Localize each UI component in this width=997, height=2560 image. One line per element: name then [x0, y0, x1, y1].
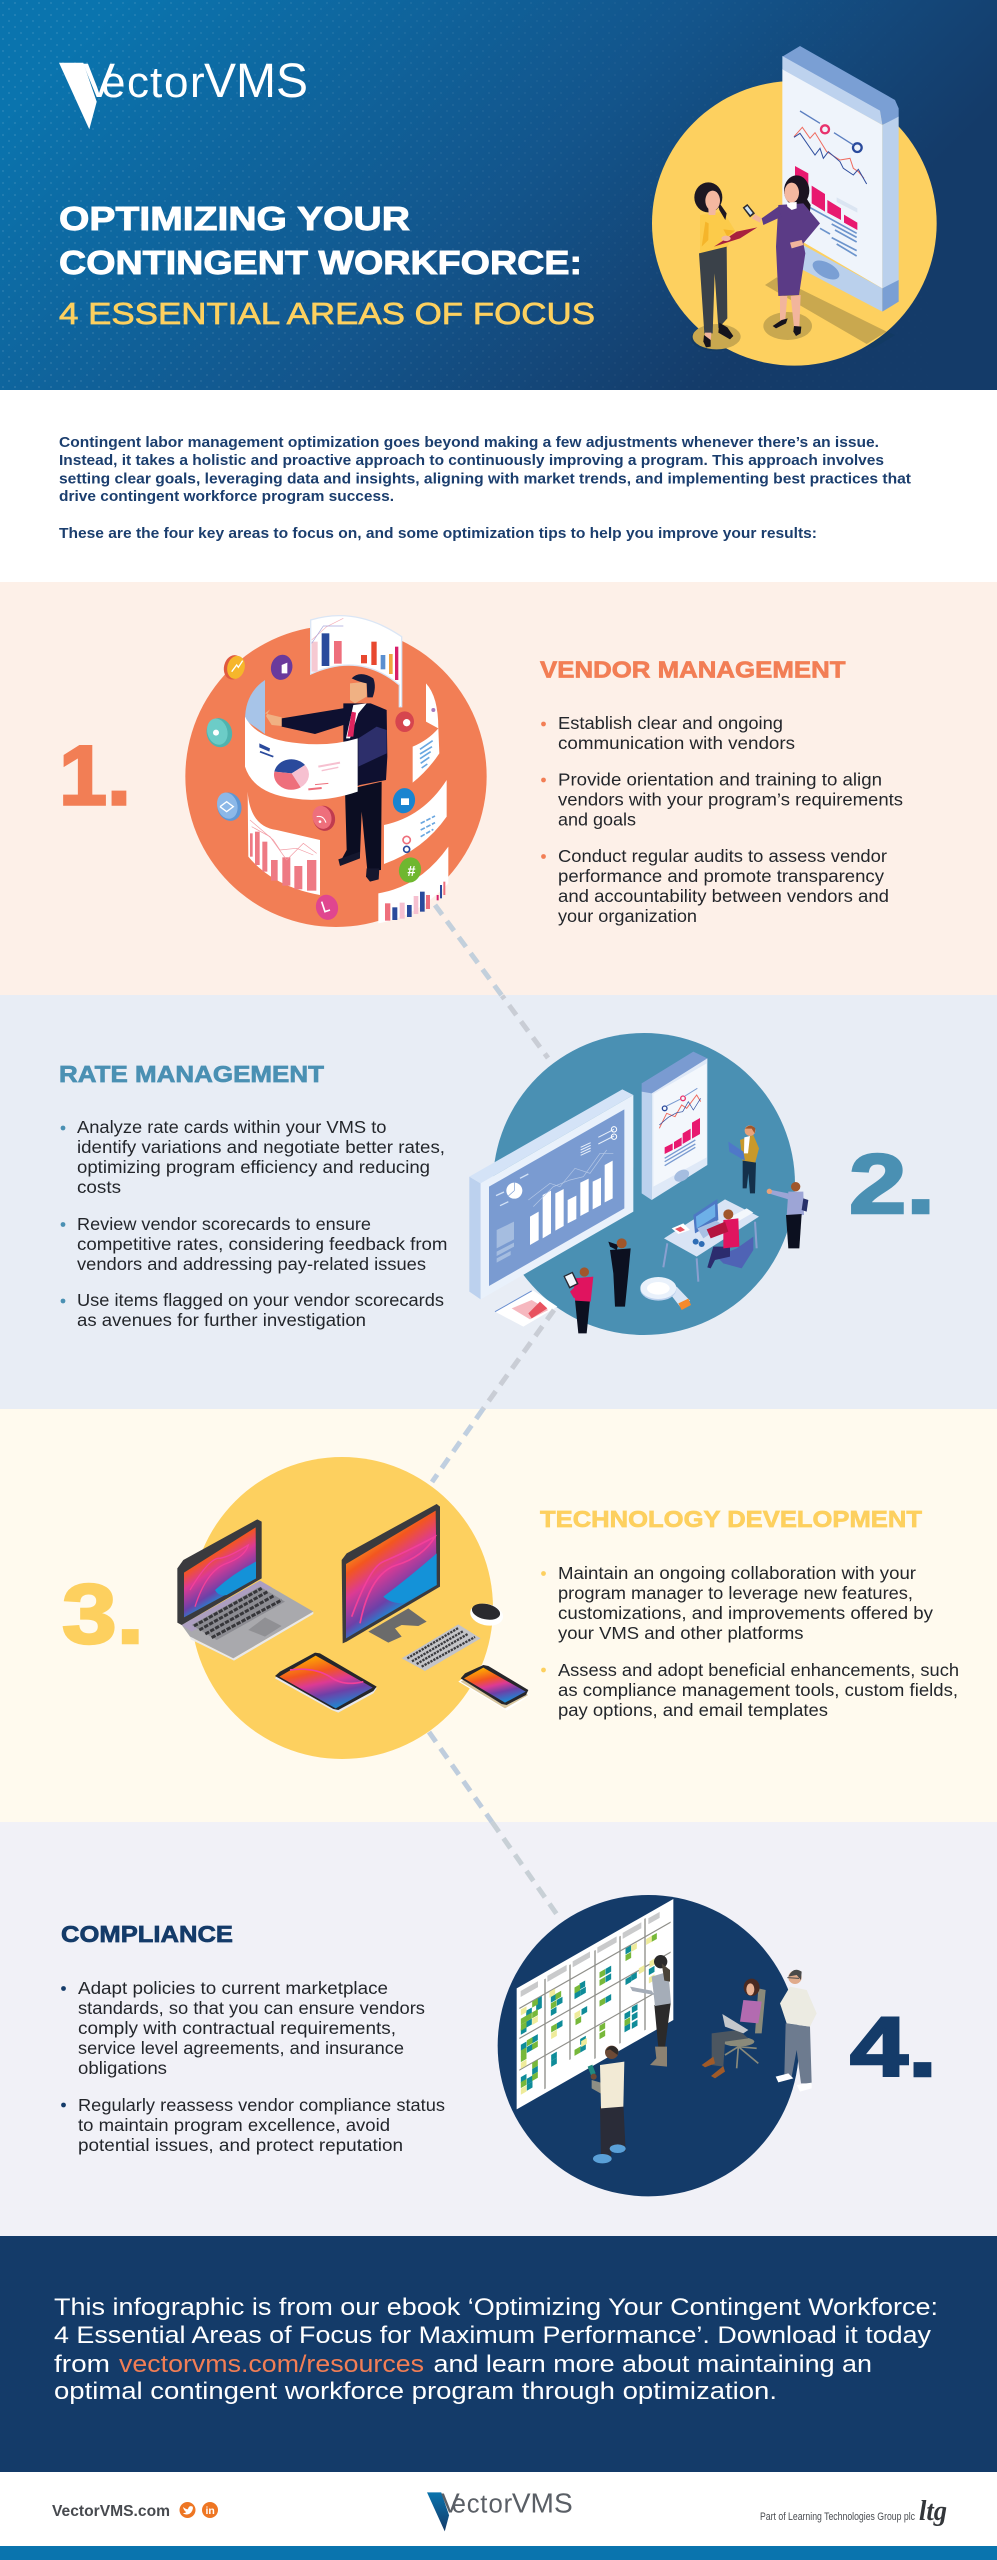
- tablet: [275, 1653, 377, 1713]
- logo: VectorVMS white: ector: [101, 58, 205, 107]
- woman at board: [630, 1955, 671, 2067]
- desk with seated person: [663, 1199, 759, 1282]
- person pointing: [767, 1182, 808, 1248]
- heading: compliance: COMPLIANCE: [61, 1921, 233, 1947]
- woman with phone: [743, 175, 820, 336]
- bullet list: vendor management: Provide orientation and training to align: [558, 770, 882, 790]
- icon: linkedin: [202, 2502, 218, 2518]
- bullet list: compliance: to maintain program excellence, avoid: [78, 2115, 390, 2135]
- group credit: Part of Learning Technologies Group plc: [760, 2511, 915, 2523]
- magnifier: [640, 1277, 691, 1310]
- website link: VectorVMS.com: [52, 2503, 170, 2520]
- bullet list: rate management: identify variations and negotiate better rates,: [77, 1137, 445, 1157]
- illustration: devices: [177, 1457, 530, 1759]
- man with phone: [588, 2046, 626, 2163]
- title: CONTINGENT WORKFORCE:: [59, 244, 582, 281]
- bullet list: rate management: [61, 1117, 447, 1330]
- seated woman with laptop: [702, 1979, 766, 2078]
- intro text: Instead, it takes a holistic and proactive approach to continuously improving a program. This approach involves: [59, 452, 884, 469]
- bullet list: rate management: Use items flagged on your vendor scorecards: [77, 1290, 444, 1310]
- logo: VectorVMS white: VMS: [204, 55, 308, 108]
- laptop: [177, 1519, 313, 1661]
- icon: twitter: [180, 2502, 196, 2518]
- logo: VectorVMS colour: [427, 2487, 573, 2531]
- icon: linkedin: in: [206, 2505, 215, 2517]
- person in black: [608, 1238, 631, 1307]
- illustration: team with dashboard: [469, 1033, 808, 1335]
- hero illustration: two women and phone chart: [652, 46, 937, 366]
- woman with folder: [694, 182, 757, 347]
- planning board: [517, 1899, 673, 2109]
- intro text: setting clear goals, leveraging data and insights, aligning with market trends, and implementing best practices that: [59, 470, 911, 488]
- panel: ebook call to action: [0, 2236, 997, 2472]
- panel: rate management: [0, 995, 997, 1409]
- intro text: [0, 390, 997, 582]
- illustration: businessman with holographic panels: [185, 616, 487, 927]
- panel: vendor management: [0, 582, 997, 995]
- title: 4 ESSENTIAL AREAS OF FOCUS: [59, 296, 595, 331]
- app icons: [203, 652, 424, 923]
- bullet list: technology development: pay options, and email templates: [558, 1700, 828, 1720]
- panel: ebook call to action: optimal contingent workforce program through optimization.: [54, 2378, 777, 2405]
- intro text: drive contingent workforce program success.: [59, 488, 394, 505]
- bullet list: compliance: standards, so that you can ensure vendors: [78, 1998, 425, 2018]
- bullet list: technology development: program manager to leverage new features,: [558, 1583, 913, 1603]
- header banner: [0, 0, 997, 390]
- keyboard: [402, 1624, 481, 1671]
- number 2: 2.: [849, 1137, 935, 1231]
- connector 2 to 3: [432, 1310, 554, 1482]
- bullet list: compliance: service level agreements, and insurance: [78, 2038, 404, 2058]
- left lower chart panel: [248, 792, 320, 895]
- panel: ebook call to action: from: [54, 2351, 110, 2378]
- logo: VectorVMS white: [59, 55, 308, 129]
- logo: VectorVMS white: V: [83, 55, 115, 108]
- logo: VectorVMS colour: V: [441, 2487, 460, 2518]
- bullet list: compliance: obligations: [78, 2058, 167, 2078]
- group credit: ltg: [919, 2496, 947, 2527]
- bullet list: technology development: your VMS and other platforms: [558, 1623, 804, 1643]
- logo: VectorVMS colour: ector: [452, 2490, 513, 2518]
- panel: ebook call to action: 4 Essential Areas of Focus for Maximum Performance’. Download it today: [54, 2322, 932, 2349]
- connector 1 to 2: [435, 905, 548, 1058]
- bullet list: vendor management: and accountability between vendors and: [558, 886, 889, 906]
- bullet list: technology development: as compliance management tools, custom fields,: [558, 1680, 958, 1700]
- man: [265, 674, 387, 882]
- connector 3 to 4: [429, 1732, 558, 1916]
- number 1: 1.: [59, 728, 131, 822]
- bullet list: rate management: Review vendor scorecards to ensure: [77, 1214, 371, 1234]
- panel: ebook call to action: vectorvms.com/resources: [119, 2351, 424, 2378]
- bullet list: vendor management: [541, 713, 903, 926]
- tablet: [642, 1052, 707, 1200]
- bullet list: compliance: Regularly reassess vendor compliance status: [78, 2095, 445, 2115]
- right panels: [378, 683, 448, 923]
- panel: ebook call to action: and learn more about maintaining an: [434, 2351, 872, 2378]
- bottom bar: [0, 2546, 997, 2560]
- bullet list: rate management: Analyze rate cards within your VMS to: [77, 1117, 386, 1137]
- bullet list: rate management: costs: [77, 1177, 121, 1197]
- phone: [458, 1665, 530, 1711]
- monitor: [469, 1089, 633, 1299]
- logo: VectorVMS colour: VMS: [512, 2487, 573, 2518]
- group credit: [760, 2496, 947, 2527]
- bullet list: technology development: customizations, and improvements offered by: [558, 1603, 933, 1623]
- mouse: [468, 1601, 505, 1629]
- panel: ebook call to action: This infographic is from our ebook ‘Optimizing Your Contingent Workforce:: [54, 2294, 938, 2321]
- title: [59, 200, 595, 331]
- bullet list: rate management: optimizing program efficiency and reducing: [77, 1157, 430, 1177]
- heading: rate management: RATE MANAGEMENT: [59, 1061, 325, 1087]
- phone: [782, 46, 899, 312]
- bullet list: technology development: Maintain an ongoing collaboration with your: [558, 1563, 916, 1583]
- panel: compliance: [0, 1822, 997, 2236]
- bullet list: vendor management: communication with vendors: [558, 733, 795, 753]
- number 4: 4.: [850, 2000, 937, 2094]
- number 3: 3.: [62, 1567, 144, 1661]
- intro text: These are the four key areas to focus on, and some optimization tips to help you improve your results:: [59, 525, 817, 542]
- desktop monitor: [342, 1504, 440, 1643]
- person with laptop: [728, 1125, 759, 1193]
- bullet list: technology development: [541, 1563, 959, 1720]
- bullet list: compliance: comply with contractual requirements,: [78, 2018, 396, 2038]
- bullet list: rate management: as avenues for further investigation: [77, 1310, 366, 1330]
- bullet list: vendor management: and goals: [558, 810, 636, 830]
- bullet list: vendor management: Conduct regular audits to assess vendor: [558, 846, 887, 866]
- bullet list: vendor management: performance and promote transparency: [558, 866, 884, 886]
- person with tablet: [563, 1267, 593, 1333]
- standing man: [776, 1970, 817, 2092]
- intro text: Contingent labor management optimization goes beyond making a few adjustments whenever there’s an issue.: [59, 434, 879, 451]
- bullet list: compliance: [61, 1978, 445, 2155]
- footer: [0, 2472, 997, 2546]
- bullet list: compliance: potential issues, and protect reputation: [78, 2135, 403, 2155]
- illustration: team at planning board: [498, 1895, 817, 2196]
- bullet list: vendor management: vendors with your program’s requirements: [558, 790, 903, 810]
- bullet list: vendor management: Establish clear and ongoing: [558, 713, 783, 733]
- bullet list: compliance: Adapt policies to current marketplace: [78, 1978, 388, 1998]
- paper: [495, 1291, 557, 1327]
- bullet list: rate management: vendors and addressing pay-related issues: [77, 1254, 426, 1274]
- heading: technology development: TECHNOLOGY DEVELOPMENT: [540, 1506, 923, 1532]
- bullet list: technology development: Assess and adopt beneficial enhancements, such: [558, 1660, 959, 1680]
- heading: vendor management: VENDOR MANAGEMENT: [540, 656, 846, 682]
- app icons: #: [407, 864, 415, 880]
- title: OPTIMIZING YOUR: [59, 200, 410, 237]
- bullet list: vendor management: your organization: [558, 906, 697, 926]
- front panel: [245, 680, 358, 800]
- bullet list: rate management: competitive rates, considering feedback from: [77, 1234, 447, 1254]
- panel: technology development: [0, 1409, 997, 1822]
